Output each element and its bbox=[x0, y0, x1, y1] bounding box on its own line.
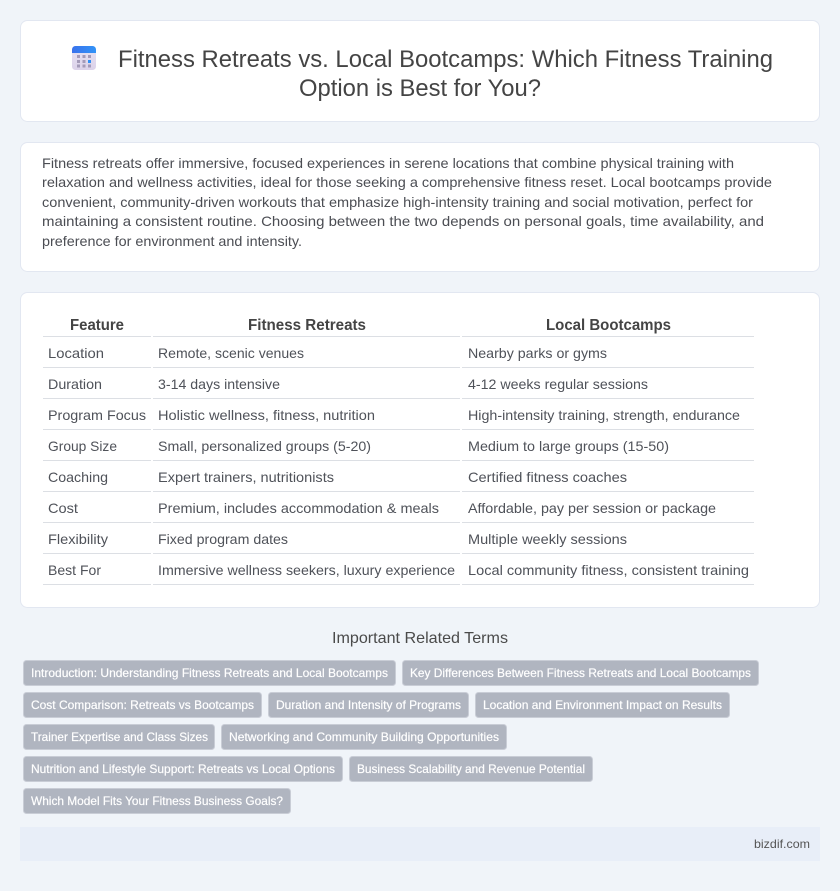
tag bbox=[476, 692, 730, 718]
row: cost: Premium, includes accommodation & meals bbox=[158, 500, 439, 516]
row: best for: Immersive wellness seekers, luxury experience bbox=[158, 562, 455, 578]
row: duration: 4-12 weeks regular sessions bbox=[468, 376, 648, 392]
tag bbox=[24, 788, 290, 814]
tag: Cost Comparison: Retreats vs Bootcamps bbox=[31, 698, 254, 712]
row: flexibility: Fixed program dates bbox=[158, 531, 288, 547]
row: program focus: Program Focus bbox=[48, 407, 146, 423]
panel: introduction text: maintaining a consistent routine. Choosing between the two depends on personal goals, time availability, and bbox=[42, 213, 764, 229]
row: group size: Medium to large groups (15-50) bbox=[468, 438, 669, 454]
title bbox=[118, 46, 773, 102]
panel: comparison table bbox=[20, 292, 820, 608]
title: Option is Best for You? bbox=[299, 75, 541, 102]
tag: Key Differences Between Fitness Retreats and Local Bootcamps bbox=[410, 666, 751, 680]
tag: Which Model Fits Your Fitness Business Goals? bbox=[31, 794, 283, 808]
tag: Duration and Intensity of Programs bbox=[276, 698, 461, 712]
panel: introduction text: preference for environment and intensity. bbox=[42, 233, 302, 249]
tag bbox=[24, 724, 214, 750]
tag: Business Scalability and Revenue Potential bbox=[357, 762, 585, 776]
row: duration bbox=[48, 376, 648, 392]
row: program focus bbox=[48, 407, 740, 423]
footer: bizdif.com bbox=[754, 837, 810, 851]
row: program focus: High-intensity training, strength, endurance bbox=[468, 407, 740, 423]
row: flexibility: Multiple weekly sessions bbox=[468, 531, 627, 547]
table header: Local Bootcamps bbox=[546, 317, 671, 334]
row: cost bbox=[48, 500, 716, 516]
panel: title card bbox=[20, 20, 820, 122]
tag bbox=[24, 756, 342, 782]
row: coaching bbox=[48, 469, 627, 485]
panel: introduction text bbox=[20, 142, 820, 272]
row: cost: Affordable, pay per session or package bbox=[468, 500, 716, 516]
row: best for: Local community fitness, consistent training bbox=[468, 562, 749, 578]
tag: Nutrition and Lifestyle Support: Retreats vs Local Options bbox=[31, 762, 335, 776]
row: flexibility: Flexibility bbox=[48, 531, 108, 547]
panel: introduction text: convenient, community-driven workouts that emphasize high-intensity training and social motivation, perfect for bbox=[42, 194, 753, 210]
row: cost: Cost bbox=[48, 500, 78, 516]
heading: important related terms: Important Related Terms bbox=[332, 630, 508, 647]
table header: Fitness Retreats bbox=[248, 317, 366, 334]
tag: Location and Environment Impact on Results bbox=[483, 698, 722, 712]
row: coaching: Coaching bbox=[48, 469, 108, 485]
icon: calendar bbox=[72, 46, 96, 70]
row: group size: Group Size bbox=[48, 438, 117, 454]
tag: Introduction: Understanding Fitness Retreats and Local Bootcamps bbox=[31, 666, 388, 680]
tag bbox=[222, 724, 506, 750]
row: group size bbox=[48, 438, 669, 454]
row: location: Location bbox=[48, 345, 104, 361]
row: location: Nearby parks or gyms bbox=[468, 345, 607, 361]
row: best for bbox=[48, 562, 749, 578]
footer bbox=[20, 827, 820, 861]
row: location: Remote, scenic venues bbox=[158, 345, 304, 361]
tag bbox=[24, 660, 396, 686]
panel: introduction text: Fitness retreats offer immersive, focused experiences in serene locations that combine physical training with bbox=[42, 155, 734, 171]
row: coaching: Expert trainers, nutritionists bbox=[158, 469, 334, 485]
row: program focus: Holistic wellness, fitness, nutrition bbox=[158, 407, 375, 423]
row: duration: 3-14 days intensive bbox=[158, 376, 280, 392]
row: best for: Best For bbox=[48, 562, 101, 578]
tag: Trainer Expertise and Class Sizes bbox=[31, 730, 208, 744]
panel: introduction text: relaxation and wellness activities, ideal for those seeking a comprehensive fitness reset. Local bootcamps provide bbox=[42, 174, 772, 190]
row: group size: Small, personalized groups (5-20) bbox=[158, 438, 371, 454]
title: Fitness Retreats vs. Local Bootcamps: Which Fitness Training bbox=[118, 46, 773, 73]
row: flexibility bbox=[48, 531, 627, 547]
row: location bbox=[48, 345, 607, 361]
row: duration: Duration bbox=[48, 376, 102, 392]
row: coaching: Certified fitness coaches bbox=[468, 469, 627, 485]
related term tags bbox=[24, 660, 758, 814]
table header: Feature bbox=[70, 317, 124, 334]
table header bbox=[70, 317, 671, 334]
tag: Networking and Community Building Opportunities bbox=[229, 730, 499, 744]
tag bbox=[402, 660, 758, 686]
tag bbox=[268, 692, 468, 718]
tag bbox=[24, 692, 262, 718]
tag bbox=[350, 756, 592, 782]
